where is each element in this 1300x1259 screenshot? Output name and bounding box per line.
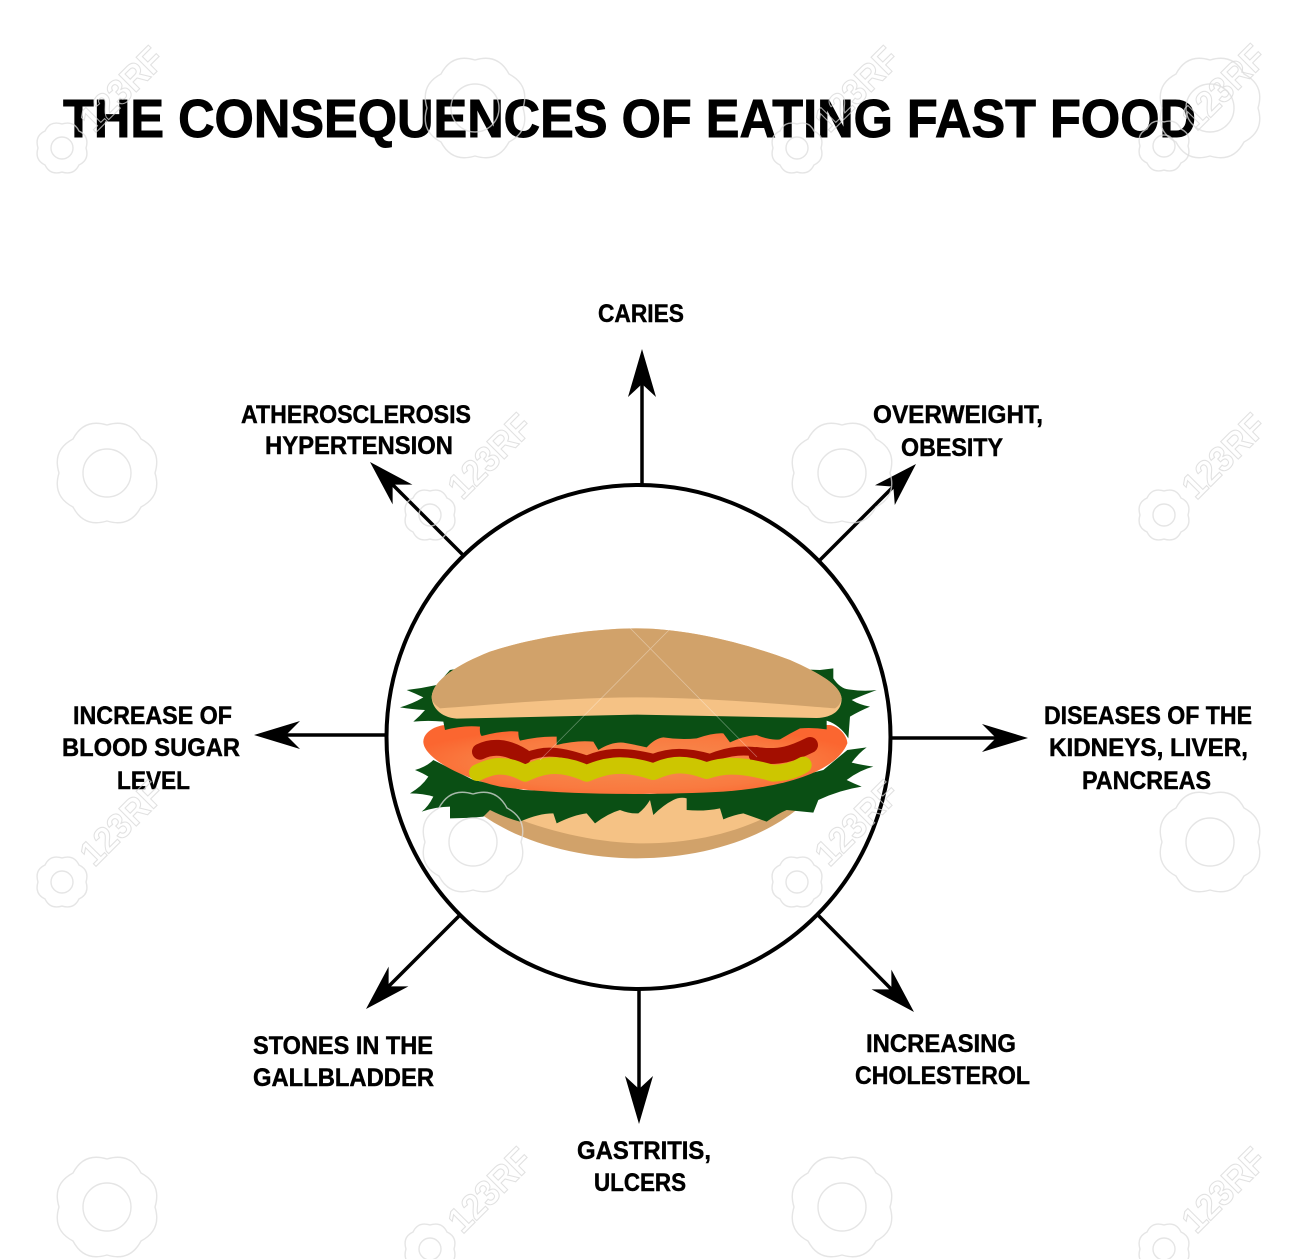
title: THE CONSEQUENCES OF EATING FAST FOOD: [63, 89, 1196, 149]
label: diseases of the kidneys, liver, pancreas: DISEASES OF THE: [1044, 702, 1252, 730]
label: gastritis, ulcers: [577, 1137, 711, 1197]
label: increasing cholesterol: INCREASING: [866, 1030, 1016, 1058]
arrow: left to blood sugar: [254, 721, 386, 749]
stock watermarks: 123RF: [1173, 405, 1274, 507]
icon: hot dog sandwich: [400, 628, 877, 858]
top bun: [432, 628, 842, 719]
arrow: right to kidneys, liver, pancreas: [892, 724, 1028, 752]
label: atherosclerosis hypertension: [241, 401, 471, 460]
stock watermarks: 123RF: [806, 772, 907, 874]
label: diseases of the kidneys, liver, pancreas: KIDNEYS, LIVER,: [1049, 734, 1248, 762]
arrow: up-left to atherosclerosis: [360, 452, 463, 555]
label: stones in the gallbladder: STONES IN THE: [253, 1032, 433, 1060]
arrow: up-right to overweight: [820, 454, 926, 560]
ketchup: [480, 745, 810, 760]
stock watermarks: 123RF: [71, 772, 172, 874]
sausage: [423, 725, 847, 794]
upper lettuce: [400, 660, 877, 750]
label: increase of blood sugar level: INCREASE OF: [73, 702, 232, 730]
label: overweight, obesity: [873, 401, 1043, 462]
label: increase of blood sugar level: LEVEL: [117, 767, 190, 795]
label: stones in the gallbladder: [253, 1032, 434, 1092]
bottom bun: [472, 797, 798, 858]
label: atherosclerosis hypertension: HYPERTENSION: [265, 432, 453, 460]
label: atherosclerosis hypertension: ATHEROSCLEROSIS: [241, 401, 471, 429]
arrow: down-right to cholesterol: [818, 915, 924, 1022]
arrow: down to gastritis: [625, 989, 653, 1124]
label: increase of blood sugar level: [62, 702, 240, 795]
label: gastritis, ulcers: GASTRITIS,: [577, 1137, 711, 1165]
stock watermarks: 123RF: [71, 38, 172, 140]
stock watermarks: 123RF: [439, 1139, 540, 1241]
arrow: down-left to gallbladder: [356, 915, 460, 1019]
label: increasing cholesterol: CHOLESTEROL: [855, 1062, 1030, 1090]
label: overweight, obesity: OVERWEIGHT,: [873, 401, 1043, 429]
central circle: [386, 485, 890, 989]
label: diseases of the kidneys, liver, pancreas: [1044, 702, 1252, 795]
stock watermarks: 123RF: [1173, 1139, 1274, 1241]
mustard: [477, 765, 803, 773]
arrow: up to caries: [628, 349, 656, 485]
label: diseases of the kidneys, liver, pancreas: PANCREAS: [1082, 767, 1211, 795]
label: increase of blood sugar level: BLOOD SUGAR: [62, 734, 240, 762]
label: caries: CARIES: [598, 300, 684, 328]
stock watermarks: 123RF: [439, 405, 540, 507]
stock watermarks: 123RF: [806, 38, 907, 140]
label: increasing cholesterol: [855, 1030, 1030, 1090]
label: overweight, obesity: OBESITY: [901, 434, 1003, 462]
stock watermarks: 123RF: [1173, 36, 1274, 138]
label: gastritis, ulcers: ULCERS: [594, 1169, 686, 1197]
lower lettuce: [410, 747, 873, 823]
label: stones in the gallbladder: GALLBLADDER: [253, 1064, 434, 1092]
